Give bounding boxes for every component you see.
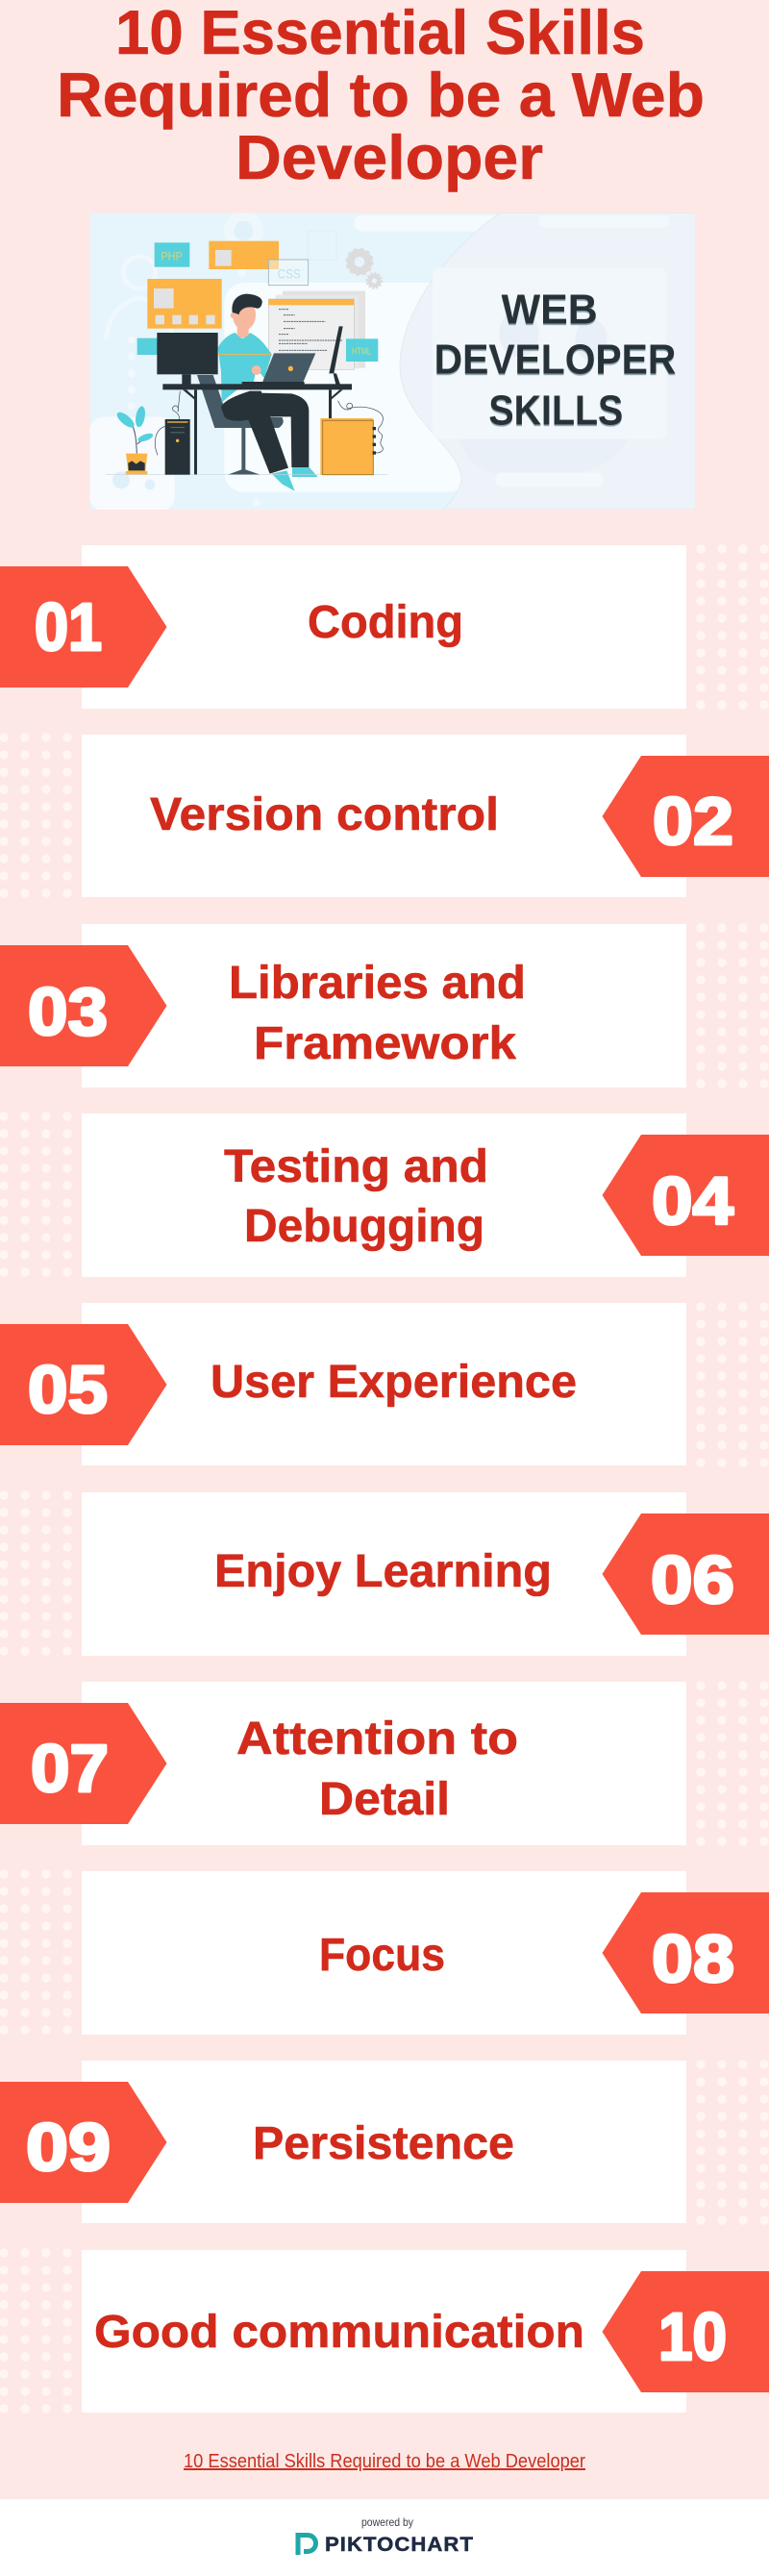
number 07: 07 — [31, 1731, 109, 1806]
side monitor — [329, 326, 343, 385]
panel: 08 focus — [0, 1869, 769, 2035]
banner image: web developer skills — [89, 211, 696, 512]
arrow badge 06 — [602, 1513, 769, 1635]
right panel with heading: SKILLS — [488, 388, 623, 435]
panel: 05 user experience — [0, 1302, 769, 1467]
icon: PHP tag: PHP — [161, 250, 183, 263]
powered by: powered by — [361, 2515, 413, 2529]
label: Libraries and Framework: Libraries and — [229, 958, 526, 1009]
icon: gears — [347, 249, 382, 288]
label: Persistence: Persistence — [253, 2118, 514, 2169]
number 10: 10 — [658, 2299, 727, 2374]
label: Libraries and Framework — [229, 958, 526, 1069]
label: Attention to Detail: Detail — [319, 1774, 450, 1825]
label: Enjoy Learning: Enjoy Learning — [214, 1546, 552, 1597]
icon: orange card large — [147, 279, 222, 329]
monitor — [157, 333, 218, 385]
icon: CSS tag: CSS — [278, 265, 301, 281]
number 08: 08 — [652, 1921, 734, 1996]
number 05: 05 — [28, 1352, 108, 1427]
number 01: 01 — [35, 589, 102, 664]
icon: potted plant — [114, 406, 154, 474]
laptop — [242, 353, 315, 385]
panel: 04 testing and debugging — [0, 1112, 769, 1277]
label: Attention to Detail: Attention to — [236, 1713, 518, 1764]
title — [57, 0, 705, 192]
desk — [162, 384, 352, 475]
icon: piktochart logo — [298, 2535, 315, 2555]
label: Coding: Coding — [308, 597, 463, 648]
number 09: 09 — [26, 2110, 111, 2185]
label: Testing and Debugging — [224, 1141, 488, 1252]
title: Required to be a Web — [57, 60, 705, 130]
label: User Experience: User Experience — [211, 1357, 577, 1408]
arrow badge 04 — [602, 1135, 769, 1256]
arrow badge 02 — [602, 756, 769, 877]
footer — [0, 2499, 769, 2576]
label: Libraries and Framework: Framework — [254, 1018, 516, 1069]
number 02: 02 — [653, 784, 733, 859]
right panel with heading: DEVELOPER — [434, 336, 676, 383]
arrow badge 10 — [602, 2271, 769, 2392]
computer tower — [155, 391, 190, 475]
icon: HTML tag: HTML — [352, 346, 371, 357]
arrow badge 07 — [0, 1703, 167, 1824]
number 03: 03 — [28, 974, 108, 1049]
chair — [197, 375, 284, 475]
panel: 10 good communication — [0, 2248, 769, 2413]
panel: 06 enjoy learning — [0, 1490, 769, 1656]
person — [218, 294, 318, 491]
label: Attention to Detail — [236, 1713, 518, 1825]
panel: 03 libraries and framework — [0, 923, 769, 1088]
label: Focus: Focus — [319, 1930, 445, 1981]
title: Developer — [236, 122, 543, 192]
number 06: 06 — [651, 1542, 734, 1617]
icon: PHP tag — [155, 242, 189, 267]
source link: 10 Essential Skills Required to be a Web Developer — [184, 2451, 585, 2472]
panel: 02 version control — [0, 733, 769, 898]
right panel with heading — [400, 213, 696, 510]
piktochart wordmark: PIKTOCHART — [325, 2534, 474, 2556]
label: Testing and Debugging: Debugging — [244, 1201, 484, 1252]
icon: orange card top — [209, 241, 279, 269]
icon: CSS tag — [268, 260, 309, 286]
arrow badge 05 — [0, 1324, 167, 1445]
panel: 07 attention to detail — [0, 1681, 769, 1846]
teal card behind monitor — [137, 338, 160, 355]
panel: 01 coding — [0, 544, 769, 710]
arrow badge 09 — [0, 2082, 167, 2203]
arrow badge 08 — [602, 1892, 769, 2013]
right panel with heading: WEB — [502, 287, 598, 334]
label: Version control: Version control — [150, 789, 499, 840]
arrow badge 01 — [0, 566, 167, 688]
orange box — [320, 401, 383, 475]
arrow badge 03 — [0, 945, 167, 1066]
label: Good communication: Good communication — [94, 2307, 584, 2358]
label: Testing and Debugging: Testing and — [224, 1141, 488, 1192]
code window — [268, 291, 365, 369]
icon: HTML tag — [346, 338, 378, 362]
number 04: 04 — [652, 1163, 733, 1238]
panel: 09 persistence — [0, 2060, 769, 2225]
floor line — [106, 474, 388, 475]
